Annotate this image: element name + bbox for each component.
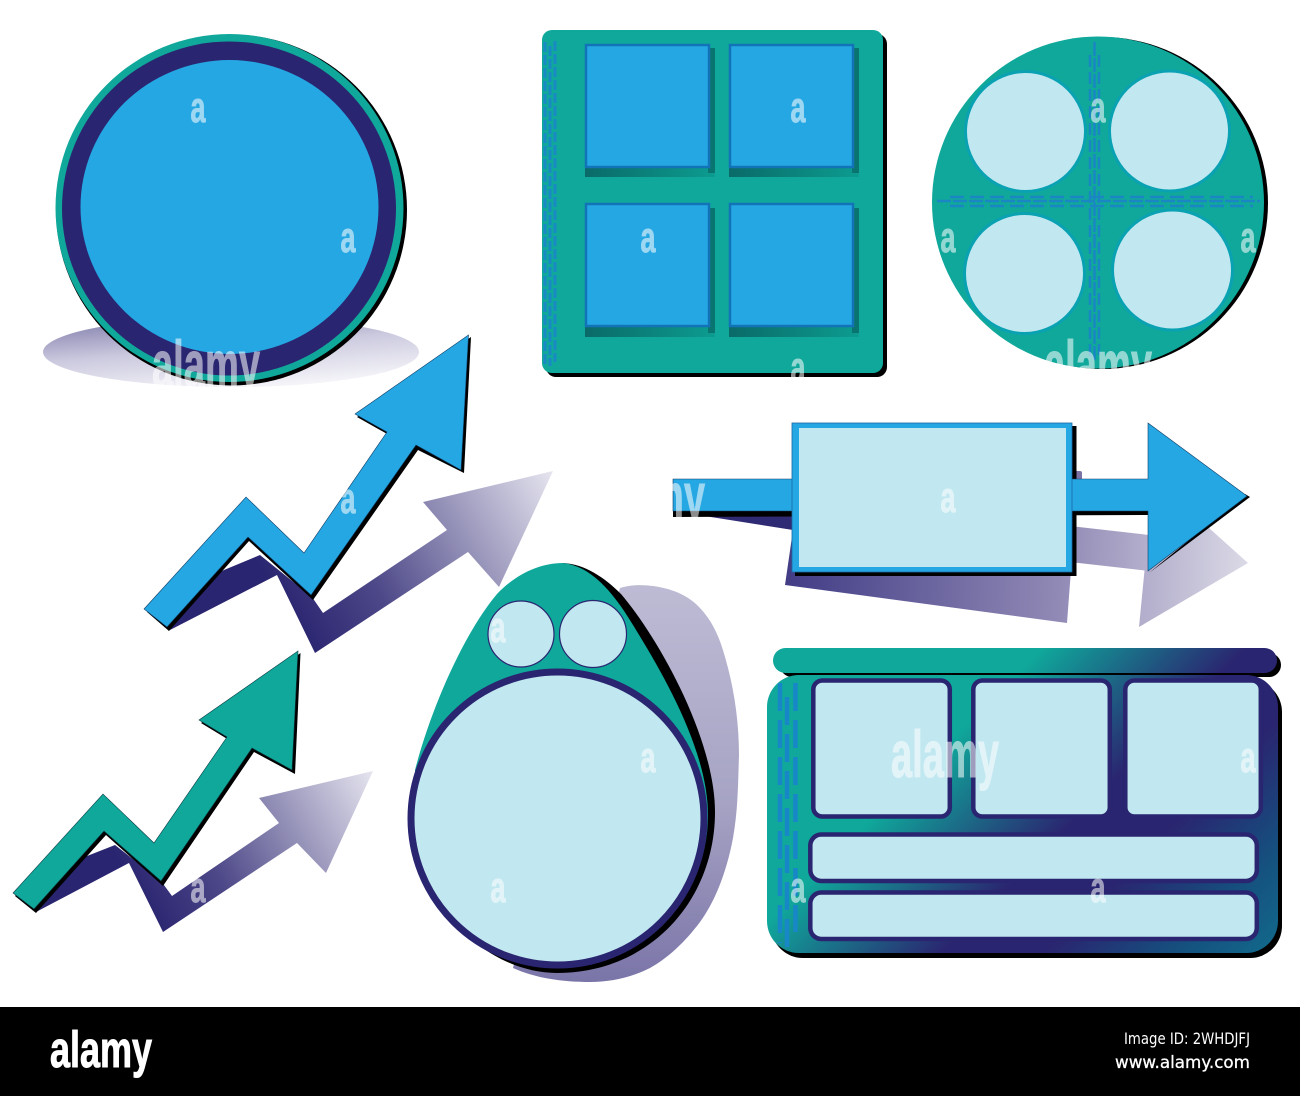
black offsets [673,509,1148,517]
blue squares [586,45,853,326]
watermarks: a [190,84,206,132]
watermarks: a [1090,864,1106,912]
watermarks: a [790,84,806,132]
small circle right [560,600,626,668]
slot boxes [810,680,1261,939]
teal egg body [415,563,708,968]
teal arrow cast shadow [36,771,373,932]
navy inner ring [62,42,396,376]
teal board [542,30,883,373]
watermarks: a [1240,734,1256,782]
panel: teal board with four blue squares [542,30,887,377]
watermarks [152,84,1256,912]
image id: Image ID: 2WHDJFJ [1124,1029,1250,1048]
panel: teal circle with four light circles [932,36,1268,369]
watermarks: a [340,214,356,262]
watermarks: a [940,214,956,262]
blue arrow body [144,335,468,627]
watermarks: a [1240,214,1256,262]
watermarks: alamy [1044,327,1152,401]
panel: gradient card with five slots [767,648,1282,958]
square right shadow strips [708,48,859,333]
circle halos [963,70,1234,335]
teal disc [932,36,1264,368]
footer logo: alamy [50,1021,152,1078]
large circle [411,672,704,965]
watermarks: alamy [152,327,260,401]
arrow: teal rising zigzag [13,651,373,932]
ground shadow ellipse [43,317,419,387]
teal outer ring [56,34,404,382]
watermarks: a [940,474,956,522]
watermarks: a [790,344,806,392]
watermarks: a [640,214,656,262]
watermarks: alamy [891,717,999,791]
watermarks: a [490,604,506,652]
watermarks: a [340,475,356,523]
horizontal arrow cast shadow [673,471,1248,627]
stitched dashes [780,683,796,948]
light box [792,423,1072,572]
watermarks: a [1090,84,1106,132]
stitched dashes left edge [545,41,555,366]
light circles [966,72,1231,332]
watermarks: a [790,864,806,912]
panel: egg shape with circles [411,563,739,982]
stitched cross [937,42,1260,362]
arrow: blue rising zigzag [144,335,553,653]
card body [767,675,1278,953]
arrow: blue horizontal arrow with light box [673,423,1250,627]
watermarks: a [640,734,656,782]
blue disc [80,60,378,354]
site url: www.alamy.com [1115,1053,1250,1073]
small circle left [488,601,554,667]
watermarks: alamy [597,459,705,533]
panel: ring circle with ground shadow [43,34,419,387]
arrow cast shadow [170,471,553,653]
egg cast shadow [513,585,739,982]
footer bar [0,1007,1300,1096]
square shadows [585,48,859,337]
watermarks: a [490,864,506,912]
watermarks: a [190,864,206,912]
card top bar [773,648,1277,673]
arrow shaft and head [673,423,1247,571]
teal arrow body [13,651,298,909]
